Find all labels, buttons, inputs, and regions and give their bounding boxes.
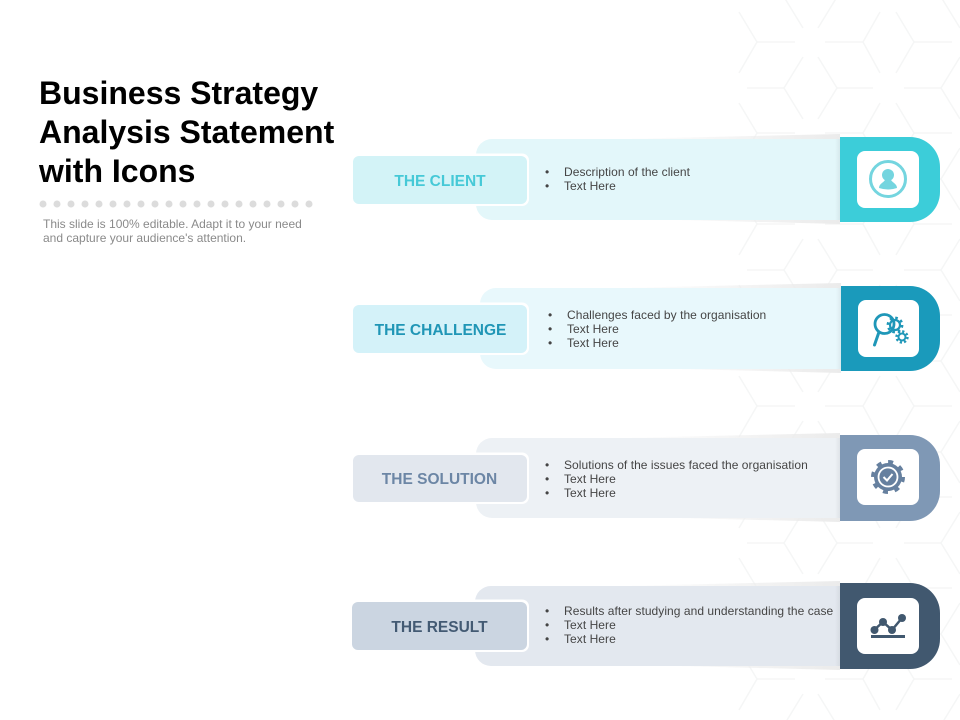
result text band	[475, 586, 840, 666]
result bullets: •	[545, 618, 549, 632]
solution bullets: •	[545, 458, 549, 472]
result label: THE RESULT	[391, 619, 488, 636]
panel: the challenge	[352, 283, 940, 373]
title: Business Strategy	[39, 75, 318, 111]
solution label	[352, 452, 529, 504]
client label	[352, 154, 529, 206]
result icon tile	[840, 583, 940, 669]
subtitle text: and capture your audience's attention.	[43, 231, 246, 245]
result label	[350, 600, 529, 652]
icon: person	[870, 162, 906, 196]
result bullets: •	[545, 632, 549, 646]
dotted divider	[40, 200, 312, 208]
challenge bullets: •	[548, 336, 552, 350]
challenge text band	[480, 288, 841, 369]
client icon tile	[840, 137, 940, 222]
challenge bullets: Challenges faced by the organisation	[567, 308, 766, 322]
client text band	[476, 139, 840, 220]
challenge icon tile	[841, 286, 940, 371]
client bullets: •	[545, 179, 549, 193]
solution bullets: •	[545, 472, 549, 486]
solution bullets: Text Here	[564, 486, 616, 500]
challenge label: THE CHALLENGE	[375, 322, 506, 339]
solution bullets: Text Here	[564, 472, 616, 486]
icon: line chart	[870, 614, 906, 638]
icon: gear with check	[873, 462, 903, 492]
panel: the solution	[352, 433, 940, 522]
challenge bullets: Text Here	[567, 336, 619, 350]
solution bullets: Solutions of the issues faced the organisation	[564, 458, 808, 472]
solution label: THE SOLUTION	[382, 471, 497, 488]
challenge bullets: Text Here	[567, 322, 619, 336]
panel: the result	[350, 581, 940, 670]
result bullets: •	[545, 604, 549, 618]
solution icon tile	[840, 435, 940, 521]
solution text band	[476, 438, 840, 518]
result bullets: Text Here	[564, 618, 616, 632]
challenge bullets: •	[548, 322, 552, 336]
solution bullets: •	[545, 486, 549, 500]
result bullets: Results after studying and understanding the case	[564, 604, 834, 618]
subtitle text: This slide is 100% editable. Adapt it to your need	[43, 217, 302, 231]
title: Analysis Statement	[39, 114, 335, 150]
panel: the client	[352, 134, 940, 224]
title: with Icons	[38, 153, 195, 189]
challenge label	[352, 302, 529, 355]
icon: magnifier and gears	[874, 314, 908, 345]
client bullets: •	[545, 165, 549, 179]
client label: THE CLIENT	[394, 173, 486, 190]
result bullets: Text Here	[564, 632, 616, 646]
challenge bullets: •	[548, 308, 552, 322]
client bullets: Text Here	[564, 179, 616, 193]
client bullets: Description of the client	[564, 165, 691, 179]
